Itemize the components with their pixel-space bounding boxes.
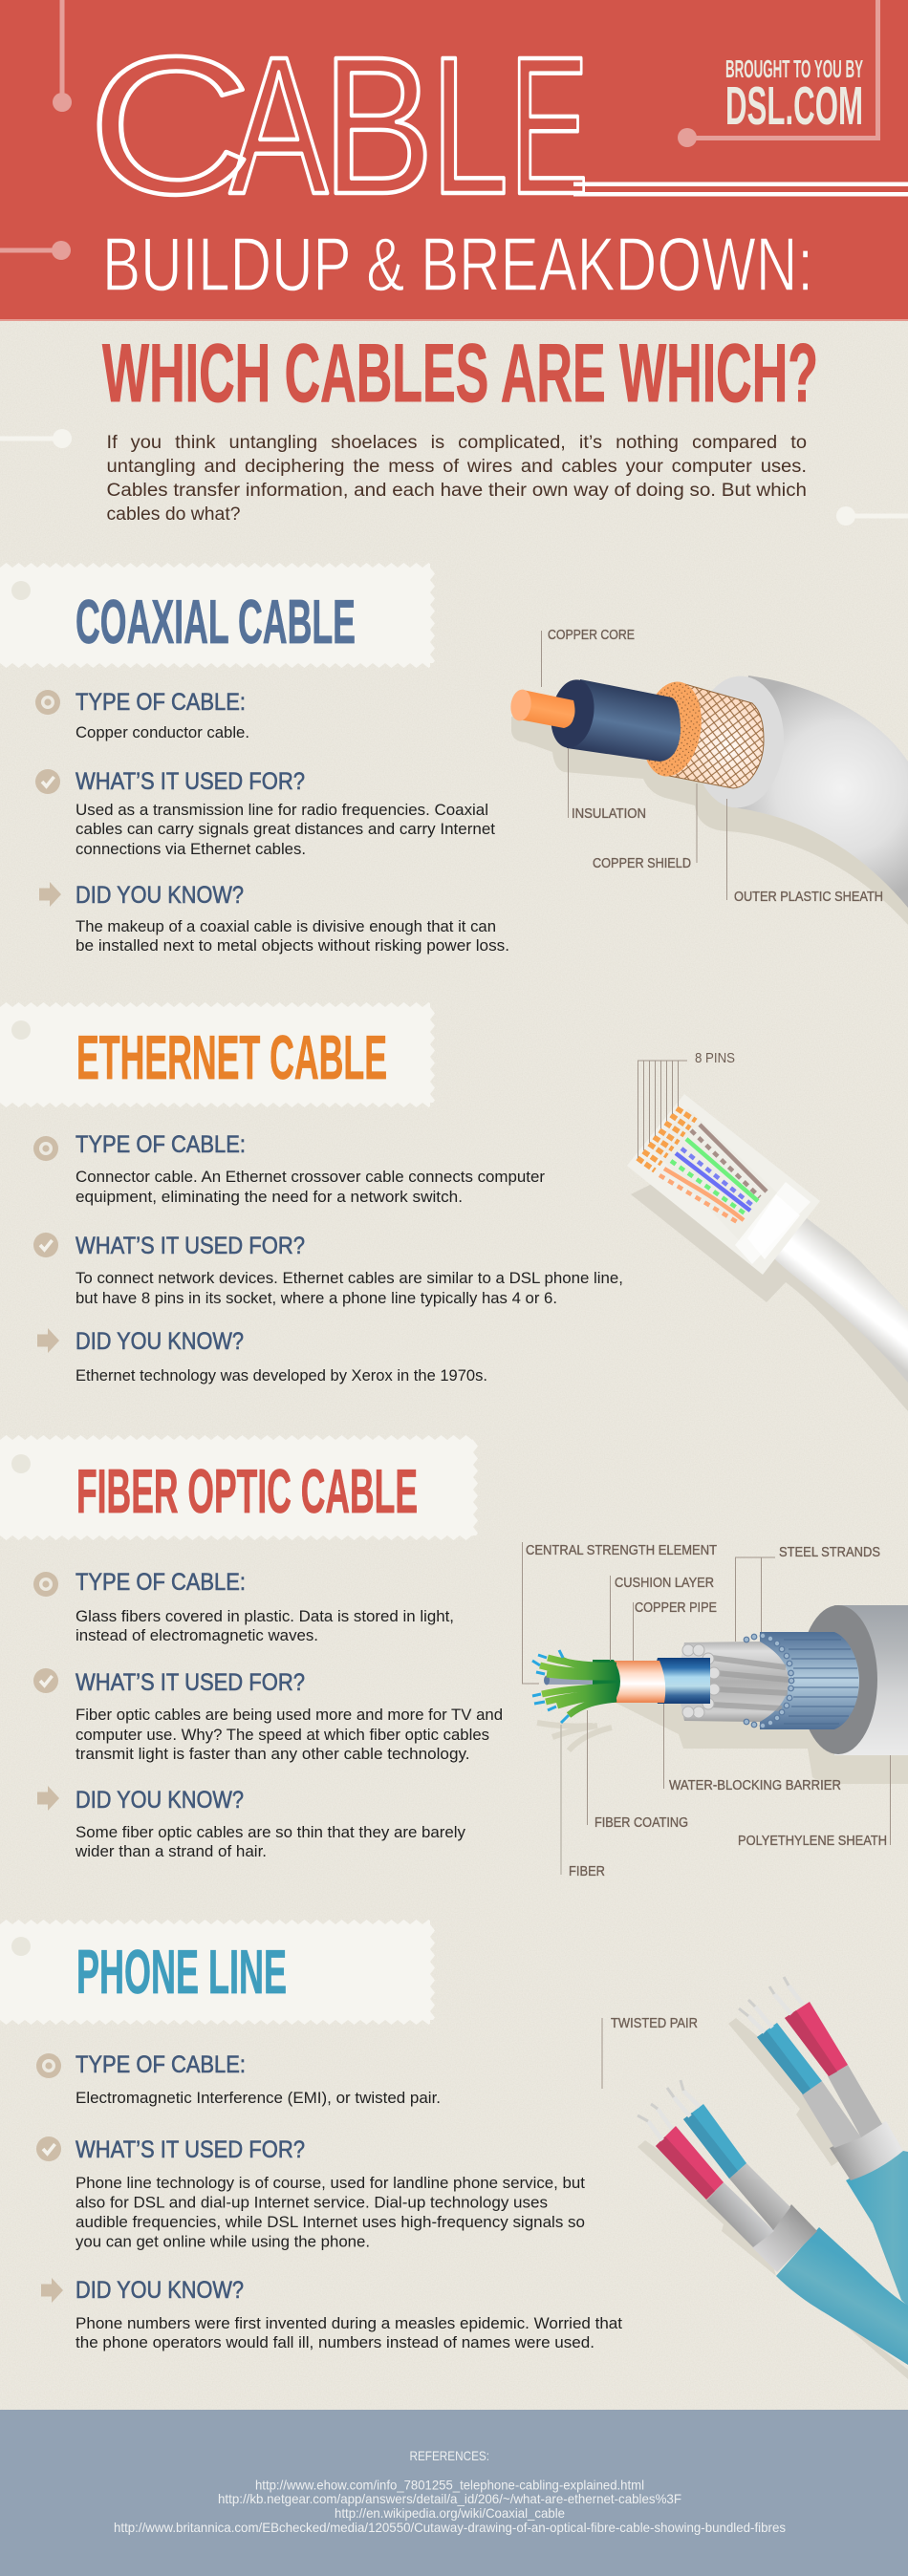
label: central strength element: CENTRAL STRENGTH ELEMENT	[526, 1543, 717, 1558]
what's it used for: Fiber optic cables are being used more and more for TV and	[76, 1706, 503, 1724]
type of cable: TYPE OF CABLE:	[76, 1131, 246, 1158]
heading tag: coaxial	[0, 563, 435, 668]
type of cable: TYPE OF CABLE:	[76, 2051, 246, 2078]
did you know: DID YOU KNOW?	[76, 882, 244, 909]
type of cable: Glass fibers covered in plastic. Data is stored in light,	[76, 1607, 454, 1625]
panel: coaxial cable	[0, 563, 509, 955]
did you know: DID YOU KNOW?	[76, 1787, 244, 1814]
did you know: the phone operators would fall ill, numbers instead of names were used.	[76, 2333, 595, 2351]
did you know: be installed next to metal objects without risking power loss.	[76, 936, 509, 955]
what's it used for: transmit light is faster than any other cable technology.	[76, 1745, 469, 1763]
label: copper core	[541, 628, 635, 687]
did you know: The makeup of a coaxial cable is divisive enough that it can	[76, 917, 496, 935]
what's it used for: also for DSL and dial-up Internet service. Dial-up technology uses	[76, 2194, 548, 2211]
type of cable: equipment, eliminating the need for a network switch.	[76, 1188, 463, 1206]
title: CABLE: A	[229, 16, 328, 235]
what's it used for	[33, 1668, 503, 1763]
label: twisted pair: TWISTED PAIR	[611, 2016, 698, 2031]
type of cable	[36, 2051, 441, 2107]
label: central strength element	[522, 1542, 717, 1684]
lower cable	[638, 2080, 908, 2365]
did you know	[37, 1328, 487, 1385]
panel: fiber optic cable	[0, 1435, 503, 1860]
title: CABLE: B	[322, 16, 434, 235]
label: steel strands	[736, 1545, 880, 1642]
label: outer plastic sheath: OUTER PLASTIC SHEATH	[734, 890, 883, 905]
label: water-blocking barrier: WATER-BLOCKING BARRIER	[669, 1778, 841, 1793]
intro paragraph: If you think untangling shoelaces is complicated, it’s nothing compared to	[107, 433, 807, 453]
type of cable: TYPE OF CABLE:	[76, 689, 246, 716]
heading tag: coaxial: COAXIAL CABLE	[76, 587, 356, 656]
label: copper shield	[593, 784, 697, 871]
what's it used for: connections via Ethernet cables.	[76, 840, 306, 858]
label: copper core: COPPER CORE	[548, 628, 635, 643]
diagram: ethernet connector	[627, 1051, 908, 1411]
type of cable: Connector cable. An Ethernet crossover cable connects computer	[76, 1168, 545, 1186]
heading tag: phone line	[0, 1920, 435, 2025]
label: copper shield: COPPER SHIELD	[593, 856, 691, 871]
diagram: coaxial cable cutaway	[508, 628, 908, 925]
did you know	[37, 1786, 465, 1860]
intro paragraph: untangling and deciphering the mess of wires and cables your computer uses.	[107, 457, 807, 477]
what's it used for: computer use. Why? The speed at which fiber optic cables	[76, 1726, 489, 1744]
brand credit	[725, 54, 863, 137]
did you know: DID YOU KNOW?	[76, 1328, 244, 1355]
label: insulation	[568, 748, 646, 822]
heading tag: fiber optic: FIBER OPTIC CABLE	[76, 1456, 418, 1526]
intro paragraph: Cables transfer information, and each have their own way of doing so. But which	[107, 481, 807, 501]
heading tag: ethernet: ETHERNET CABLE	[76, 1022, 387, 1092]
what's it used for: audible frequencies, while DSL Internet uses high-frequency signals so	[76, 2213, 585, 2231]
did you know: DID YOU KNOW?	[76, 2277, 244, 2304]
label: copper pipe	[633, 1600, 717, 1661]
upper cable	[739, 1977, 908, 2307]
label: cushion layer	[610, 1576, 714, 1661]
intro paragraph: cables do what?	[107, 504, 241, 525]
what's it used for	[33, 1233, 623, 1307]
heading tag: ethernet	[0, 1002, 435, 1107]
decorative pins	[0, 429, 908, 526]
what's it used for: cables can carry signals great distances and carry Internet	[76, 820, 495, 838]
what's it used for	[35, 768, 495, 858]
footer: references: http://www.ehow.com/info_7801255_telephone-cabling-explained.html	[255, 2477, 644, 2492]
footer: references	[0, 2410, 908, 2576]
label: polyethylene sheath: POLYETHYLENE SHEATH	[738, 1834, 887, 1849]
label: fiber coating	[587, 1710, 688, 1831]
what's it used for: but have 8 pins in its socket, where a phone line typically has 4 or 6.	[76, 1289, 557, 1307]
title: CABLE: C	[88, 16, 252, 235]
did you know: Some fiber optic cables are so thin that they are barely	[76, 1823, 465, 1841]
label: steel strands: STEEL STRANDS	[779, 1545, 880, 1560]
what's it used for: Phone line technology is of course, used for landline phone service, but	[76, 2174, 585, 2192]
title: CABLE: E	[509, 16, 589, 235]
did you know	[39, 882, 509, 955]
label: fiber: FIBER	[569, 1864, 605, 1879]
what's it used for: WHAT’S IT USED FOR?	[76, 768, 305, 795]
panel: phone line	[0, 1920, 622, 2351]
label: insulation: INSULATION	[572, 806, 646, 822]
diagram: fiber optic cutaway	[522, 1542, 908, 1879]
header band	[0, 0, 908, 321]
label: 8 pins	[638, 1051, 735, 1158]
footer: references: http://www.britannica.com/EBchecked/media/120550/Cutaway-drawing-of-an-optical-fibre-cable-showing-bundled-fibres	[114, 2520, 786, 2535]
what's it used for: Used as a transmission line for radio frequencies. Coaxial	[76, 801, 488, 819]
panel: ethernet cable	[0, 1002, 623, 1385]
type of cable	[33, 1131, 545, 1206]
type of cable: instead of electromagnetic waves.	[76, 1626, 318, 1644]
footer: references: REFERENCES:	[409, 2448, 489, 2463]
diagram: twisted pair	[602, 1977, 908, 2379]
type of cable	[33, 1569, 454, 1644]
footer: references: http://kb.netgear.com/app/answers/detail/a_id/206/~/what-are-ethernet-cables%3F	[218, 2491, 681, 2506]
what's it used for: WHAT’S IT USED FOR?	[76, 2136, 305, 2163]
label: twisted pair	[602, 2016, 698, 2089]
did you know	[41, 2277, 622, 2351]
heading tag: phone line: PHONE LINE	[76, 1937, 287, 2007]
type of cable: Copper conductor cable.	[76, 723, 249, 741]
type of cable	[35, 689, 249, 741]
footer: references: http://en.wikipedia.org/wiki/Coaxial_cable	[335, 2505, 565, 2521]
title: CABLE: L	[431, 16, 508, 235]
label: 8 pins: 8 PINS	[695, 1051, 735, 1066]
type of cable: TYPE OF CABLE:	[76, 1569, 246, 1596]
what's it used for: WHAT’S IT USED FOR?	[76, 1669, 305, 1696]
did you know: wider than a strand of hair.	[75, 1842, 267, 1860]
heading tag: fiber optic	[0, 1435, 478, 1540]
type of cable: Electromagnetic Interference (EMI), or twisted pair.	[76, 2089, 441, 2107]
did you know: Ethernet technology was developed by Xerox in the 1970s.	[76, 1366, 487, 1385]
what's it used for: you can get online while using the phone.	[76, 2232, 370, 2251]
intro paragraph	[107, 433, 807, 525]
label: fiber coating: FIBER COATING	[595, 1815, 688, 1831]
what's it used for	[36, 2136, 585, 2251]
what's it used for: To connect network devices. Ethernet cables are similar to a DSL phone line,	[76, 1269, 623, 1287]
label: cushion layer: CUSHION LAYER	[615, 1576, 714, 1591]
label: copper pipe: COPPER PIPE	[635, 1600, 717, 1616]
did you know: Phone numbers were first invented during a measles epidemic. Worried that	[76, 2314, 622, 2332]
what's it used for: WHAT’S IT USED FOR?	[76, 1233, 305, 1259]
